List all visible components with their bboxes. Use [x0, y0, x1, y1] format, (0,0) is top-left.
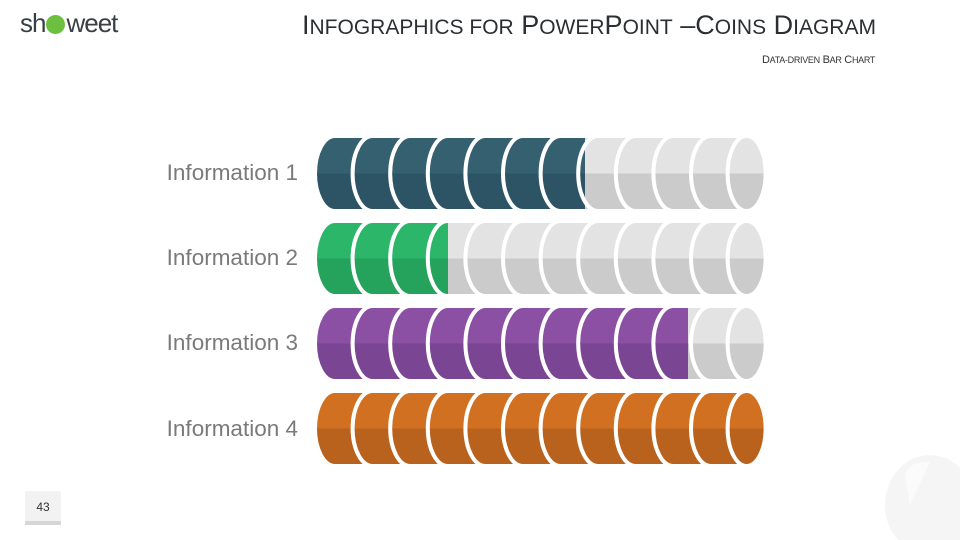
label: Information 3: Information 3 — [167, 330, 298, 355]
label: Information 4: Information 4 — [167, 416, 298, 441]
label: Information 1: Information 1 — [167, 160, 298, 185]
row 3 coins — [315, 306, 766, 381]
row 1 coins — [315, 136, 766, 211]
row 4 coins — [315, 391, 766, 466]
logo: sh weet — [20, 8, 117, 38]
page number: 43 — [36, 500, 50, 514]
label: Information 2: Information 2 — [167, 245, 298, 270]
coins chart — [317, 138, 960, 540]
title: INFOGRAPHICS FOR POWERPOINT –COINS DIAGRAM — [302, 10, 876, 40]
watermark logo — [885, 455, 960, 540]
page number — [25, 491, 61, 525]
row 2 coins — [315, 221, 766, 296]
subtitle: DATA-DRIVEN BAR CHART — [762, 54, 875, 66]
